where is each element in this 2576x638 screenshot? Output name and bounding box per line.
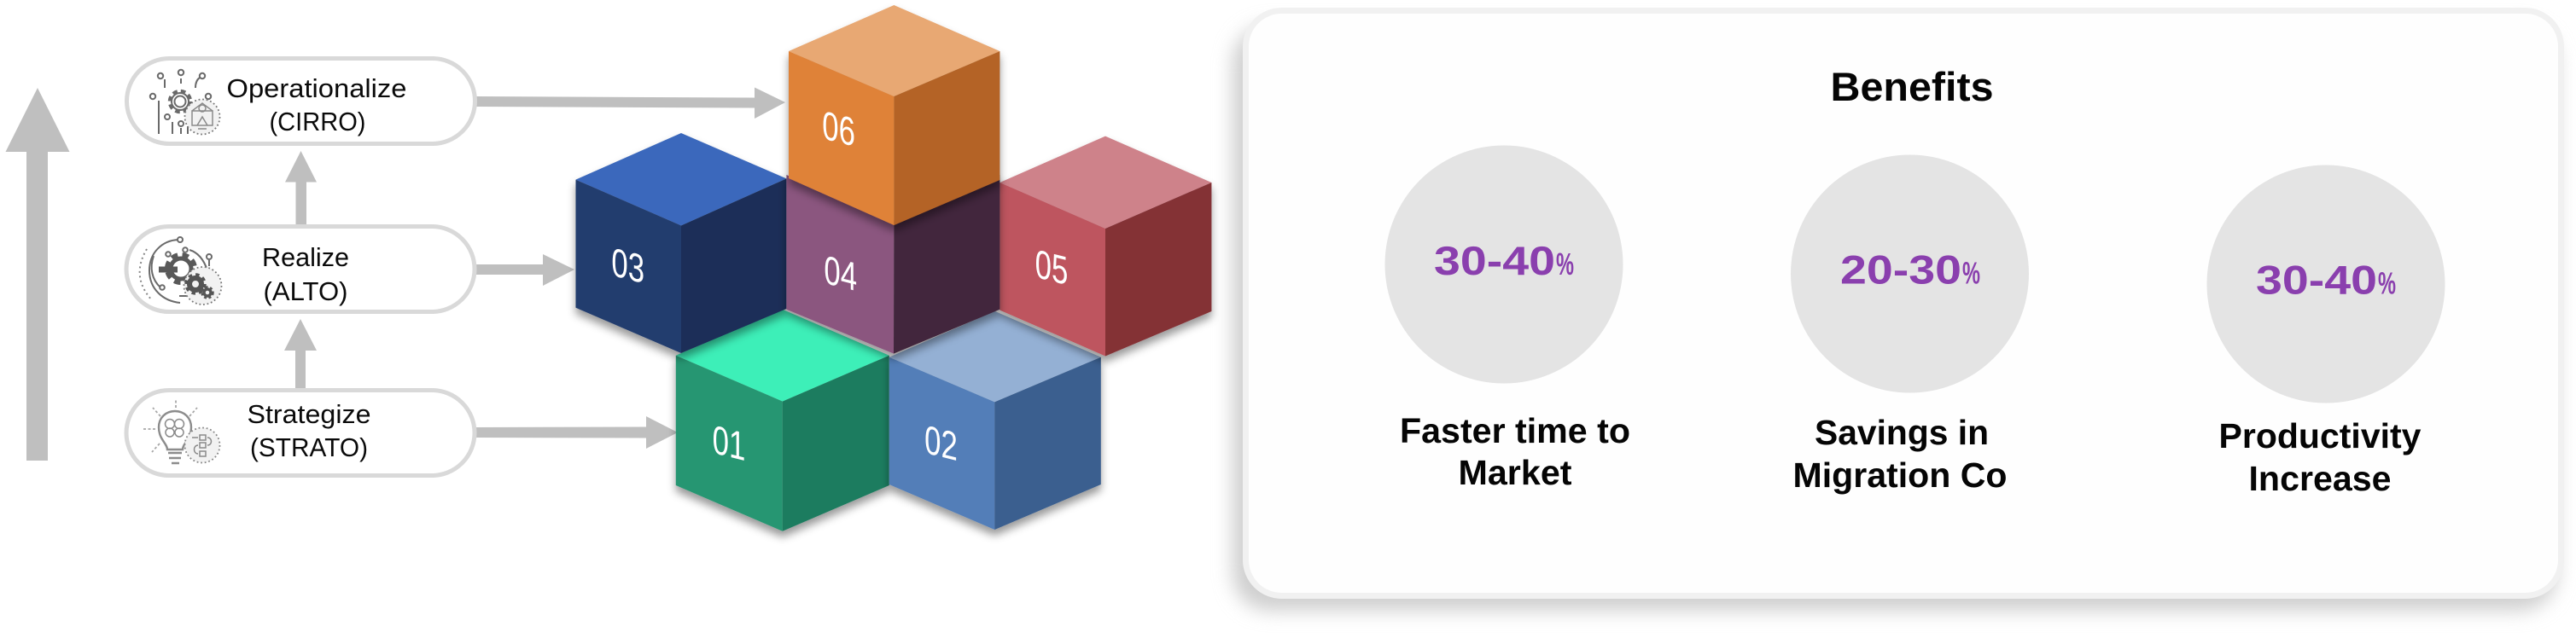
- step: Operationalize (CIRRO): [126, 58, 475, 143]
- metric value: 20-30: [1840, 247, 1961, 292]
- label: Increase: [2248, 459, 2392, 498]
- cube 03: [575, 133, 786, 353]
- number 01: 01: [713, 416, 745, 469]
- cube 01: [676, 310, 889, 531]
- heading: Benefits: Benefits: [1830, 64, 1994, 109]
- label: Market: [1458, 453, 1572, 492]
- label: (CIRRO): (CIRRO): [270, 107, 365, 136]
- metric value: %: [2378, 266, 2396, 300]
- metric value: 30-40: [1434, 238, 1555, 283]
- benefit: savings in migration cost: [1791, 155, 2029, 495]
- label: Faster time to: [1400, 411, 1630, 450]
- label: Strategize: Strategize: [248, 399, 370, 429]
- cube 05: [1000, 136, 1211, 357]
- metric value: %: [1962, 256, 1980, 290]
- arrow: Strategize to Realize: [284, 319, 317, 389]
- metric value: %: [1556, 246, 1574, 281]
- metric circle: [1384, 145, 1623, 384]
- label: Migration Co: [1792, 455, 2008, 495]
- label: (STRATO): (STRATO): [250, 432, 368, 462]
- arrow: Strategize to cube 01: [475, 416, 678, 449]
- label: [1792, 413, 2008, 495]
- benefit: productivity increase: [2207, 165, 2445, 498]
- label: Realize: Realize: [262, 242, 349, 272]
- step: Realize (ALTO): [126, 227, 475, 312]
- arrow: Realize to cube 03: [476, 254, 574, 286]
- number 06: 06: [822, 102, 855, 155]
- number 04: 04: [824, 246, 857, 299]
- arrow: Realize to Operationalize: [285, 151, 317, 225]
- label: Operationalize: Operationalize: [227, 73, 406, 103]
- label: Savings in: [1815, 413, 1989, 452]
- cube 04: [786, 175, 1000, 354]
- benefit: faster time to market: [1384, 145, 1630, 492]
- label: [2219, 416, 2422, 498]
- icon: light bulb with brain and flow: [142, 400, 220, 463]
- icon: gears and circuits: [140, 237, 222, 304]
- number 03: 03: [611, 239, 644, 292]
- number 02: 02: [924, 416, 958, 469]
- cube 06: [789, 5, 1000, 225]
- step: Strategize (STRATO): [126, 391, 475, 476]
- label: [1400, 411, 1630, 492]
- number 05: 05: [1035, 241, 1068, 293]
- label: (ALTO): (ALTO): [263, 276, 348, 306]
- metric circle: [1791, 155, 2029, 392]
- big upward arrow: [5, 88, 70, 461]
- panel: benefits: [1233, 10, 2561, 611]
- arrow: Operationalize to cube 06: [476, 87, 785, 119]
- icon: circuit gear with monitor: [150, 70, 220, 135]
- metric value: 30-40: [2256, 258, 2377, 302]
- cube 02: [889, 311, 1101, 530]
- label: Productivity: [2219, 416, 2422, 455]
- metric circle: [2207, 165, 2445, 403]
